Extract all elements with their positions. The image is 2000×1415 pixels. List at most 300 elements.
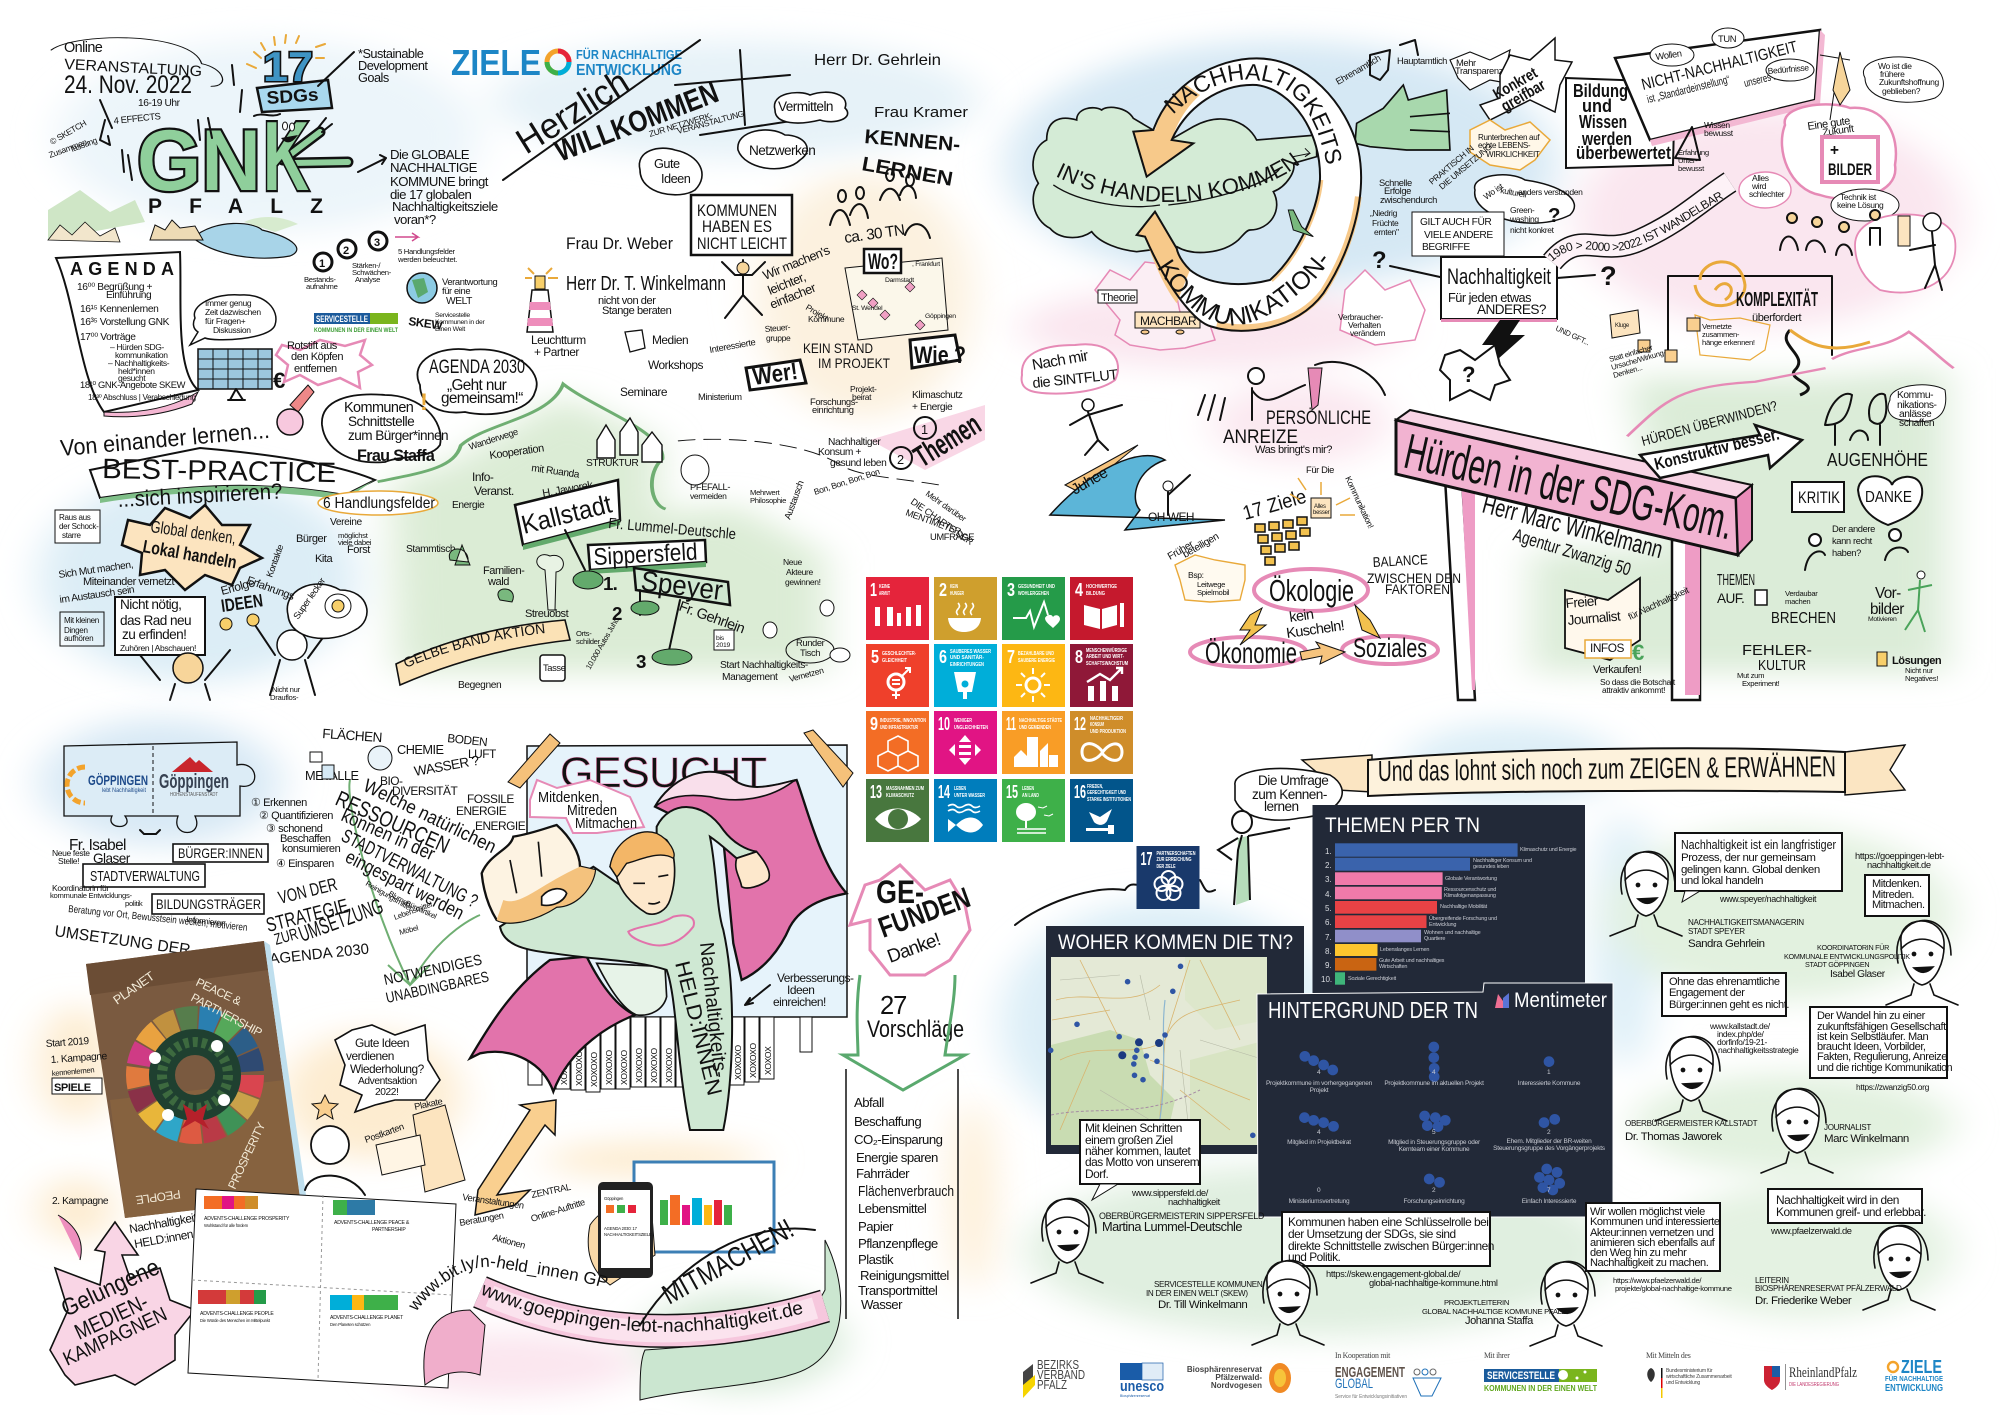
Augenhoehe: AUGENHÖHE (1827, 450, 1928, 470)
tile 2: HUNGER (950, 591, 964, 597)
hand-side bubbles: ? (1372, 247, 1386, 274)
ring lettering: KOMMUNIKATION- (1158, 256, 1326, 326)
Wer wie kein Stand (698, 302, 966, 415)
bar chart: Wirtschaften (1379, 964, 1407, 970)
tile 7: 7 (1007, 647, 1015, 667)
quote Staffa: Johanna Staffa (1465, 1315, 1534, 1327)
quote Lummel (1031, 1120, 1265, 1283)
campaign notes: 1. Kampagne (50, 1051, 108, 1066)
resource words: FOSSILE (467, 792, 514, 806)
Hintergrund panel: Projekt (1310, 1087, 1329, 1094)
Hintergrund panel: 4 (1432, 1069, 1436, 1076)
tile 12: NACHHALTIGE/R (1090, 716, 1123, 722)
SKEW logos: Kommunen in der (435, 319, 485, 326)
Gesucht poster (508, 730, 853, 1092)
journalist book (1565, 578, 1691, 695)
quote Till Winkelmann: Kommunen haben eine Schlüsselrolle bei (1288, 1215, 1488, 1229)
tile 15: LEBEN (1022, 786, 1034, 792)
Themen brechen etc: BRECHEN (1771, 610, 1836, 627)
hero text: Mitmachen (575, 815, 637, 832)
Themen brechen etc: THEMEN (1717, 572, 1755, 589)
tile 12: UND PRODUKTION (1090, 729, 1126, 735)
BMZ: Mit Mitteln des (1646, 1351, 1691, 1360)
quote Glaser: Mitdenken. (1872, 878, 1922, 890)
GNK explanation: NACHHALTIGE (390, 160, 478, 175)
Komplexitaet: KOMPLEXITÄT (1736, 288, 1818, 311)
bar chart: Gute Arbeit und nachhaltiges (1379, 958, 1445, 964)
quote Jaworek: Dr. Thomas Jaworek (1625, 1131, 1722, 1143)
Themen arrow and chart note: Mehr darüber (924, 488, 968, 524)
bar chart: 2. (1325, 861, 1332, 870)
tile 10: WENIGER (954, 718, 972, 724)
advent challenge cards: Die Würde des Menschen im Mittelpunkt (200, 1318, 271, 1323)
Hintergrund panel: Ehem. Mitglieder der BR-weiten (1507, 1138, 1592, 1145)
town signs: Fr. Gehrlein (677, 599, 747, 637)
Themen arrow and chart note: 2 (897, 452, 904, 467)
yellow band ribbon: GELBE BAND AKTION (404, 624, 544, 666)
hero text: Nachhaltigkeits- (695, 941, 731, 1079)
17 SDGs sign (247, 35, 428, 112)
Themen arrow and chart note: gesund leben (830, 458, 887, 469)
stakeholder boxes: UMSETZUNG DER... (53, 923, 204, 961)
tile 11: NACHHALTIGE STÄDTE (1019, 717, 1062, 724)
campaign notes: kennenlernen (51, 1065, 95, 1078)
agenda scroll: kommunikation (115, 350, 168, 360)
tile 8: 8 (1075, 647, 1083, 667)
Wer wie kein Stand: Steuer- (764, 322, 791, 334)
hand-side bubbles: Transparenz (1455, 66, 1504, 76)
stakeholder boxes: Informieren (186, 914, 226, 928)
yellow band ribbon (395, 616, 621, 691)
17 Ziele and balance: Früher (1166, 539, 1196, 563)
puzzle logos: GÖPPINGEN (88, 772, 148, 788)
welcome title: Herzlich (509, 61, 636, 162)
agenda scroll: 18³⁰ Abschluss | Verabschiedung (88, 393, 196, 402)
journalist book: attraktiv ankommt! (1602, 685, 1665, 695)
tile 14: UNTER WASSER (954, 793, 985, 799)
Persoenliche Anreize: PERSÖNLICHE (1266, 408, 1371, 429)
Agenda 2030 cloud: gemeinsam!“ (441, 390, 523, 407)
quote Staffa: Kommunen und interessierte (1590, 1216, 1720, 1228)
journalist book: Freier (1565, 593, 1599, 611)
resource words: DIVERSITÄT (392, 784, 457, 798)
quote Lummel: Mit kleinen Schritten (1085, 1121, 1182, 1135)
left notes: Raus aus (59, 513, 91, 522)
Themen arrow and chart note: Konsum + (818, 447, 861, 458)
Best practice arrow (59, 417, 375, 512)
Rotstift bubble (273, 340, 372, 435)
Bildung und Wissen: und (1582, 96, 1612, 116)
Rad bubble: Nicht nur (272, 685, 301, 694)
Agenda 2030 cloud: Frau Staffa (357, 447, 436, 465)
quote Winkelmann: https://zwanzig50.org (1856, 1082, 1930, 1092)
Wer wie kein Stand: Projekt- (804, 302, 832, 324)
Agenda 2030 cloud: Kommunen (344, 400, 414, 416)
SKEW logos: KOMMUNEN IN DER EINEN WELT (314, 328, 398, 334)
Gute Ideen bubble: verdienen (346, 1049, 394, 1063)
media items: Medien (652, 333, 688, 347)
Wer wie kein Stand: gruppe (766, 333, 791, 343)
tile 3: GESUNDHEIT UND (1018, 584, 1055, 590)
website and phone: AGENDA 2030: 17 (604, 1226, 638, 1231)
Wer wie kein Stand: KEIN STAND (803, 340, 873, 356)
Rad bubble: Erfahrungs (245, 575, 297, 603)
quote Till Winkelmann: der Umsetzung der SDGs, sie sind (1288, 1227, 1456, 1241)
tile 16: STARKE INSTITUTIONEN (1087, 797, 1131, 803)
Zukunft frame: schlechter (1749, 189, 1785, 199)
Komplexitaet: Denken... (1612, 363, 1644, 380)
stakeholder boxes: kommunale Entwicklungs- (50, 891, 132, 900)
tile 17: PARTNERSCHAFTEN (1156, 851, 1196, 857)
right side small: Mehrwert (750, 488, 781, 497)
Hintergrund panel: 5 (1432, 1129, 1436, 1136)
town signs: bis (716, 635, 725, 642)
hand-side bubbles: zwischendurch (1380, 195, 1437, 205)
town signs: Speyer (639, 565, 724, 606)
proposals list: Wasser (861, 1297, 903, 1312)
welcome title: WILLKOMMEN (551, 76, 723, 169)
watercolour washes (38, 719, 992, 1396)
bubble and video grid: Zeit dazwischen (205, 307, 261, 317)
left notes: Sich Mut machen, (58, 560, 134, 581)
quote Gehrlein: und lokal handeln (1681, 875, 1763, 887)
hand-side bubbles: Früchte (1372, 218, 1399, 228)
Gute Ideen bubble: Postkarten (363, 1121, 405, 1145)
Ziele logo small: FÜR NACHHALTIGE (1885, 1374, 1943, 1383)
agenda scroll: AGENDA (70, 259, 174, 279)
Themen brechen etc (1717, 571, 1942, 688)
Hintergrund panel: Mitglied in Steuerungsgruppe oder (1388, 1139, 1481, 1146)
Themen brechen etc: AUF. (1717, 591, 1744, 606)
Rheinland-Pfalz: DIE LANDESREGIERUNG (1789, 1382, 1839, 1388)
Handlungsfelder: wald (487, 576, 509, 588)
Kennenlernen and people: KENNEN- (864, 126, 961, 156)
journalist book: Journalist (1567, 608, 1621, 628)
tile 14 (934, 779, 997, 842)
bar chart: Nachhaltiger Konsum und (1473, 858, 1532, 864)
journalist book: für Nachhaltigkeit (1627, 585, 1691, 622)
Bildung und Wissen: Wissen (1704, 120, 1730, 130)
event info: © SKETCH (48, 118, 88, 147)
tile 17 (1136, 846, 1200, 909)
tile 4: HOCHWERTIGE (1086, 584, 1117, 590)
agenda scroll: 16³⁵ Vorstellung GNK (80, 317, 170, 328)
Hintergrund panel: Interessierte Kommune (1518, 1080, 1581, 1087)
quote Glaser: KOMMUNALE ENTWICKLUNGSPOLITIK (1784, 952, 1910, 961)
analysis steps: werden beleuchtet. (397, 255, 457, 264)
bubble and video grid: für Fragen+ (205, 316, 246, 326)
hand-side bubbles: echte LEBENS- (1478, 141, 1531, 150)
advent challenge cards (188, 1189, 456, 1388)
Persoenliche Anreize: Was bringt's mir? (1255, 444, 1332, 456)
yellow band ribbon: Tasse (543, 663, 566, 673)
clouds and box: Kommunen: Vermitteln (778, 99, 833, 114)
Theorie Machbar (1095, 262, 1215, 350)
Nachhaltigkeit box: verändern (1350, 328, 1386, 338)
hand-side bubbles: nicht konkret (1510, 225, 1555, 235)
analysis steps: aufnahme (306, 282, 338, 291)
Rad bubble: Zuhören | Abschauen! (120, 643, 196, 653)
Nachhaltigkeit box: ? (1462, 362, 1475, 387)
Gesucht poster: XOXOXO (619, 1050, 629, 1085)
Augenhoehe (1825, 385, 1946, 470)
puzzle logos: lebt Nachhaltigkeit (102, 788, 146, 794)
Ziele logo small: ZIELE (1901, 1357, 1942, 1377)
quote Jaworek (1625, 973, 1799, 1143)
journalist book: INFOS (1590, 641, 1624, 655)
Nachhaltigkeit box: ANDERES? (1477, 302, 1547, 317)
quote Lummel: näher kommen, lautet (1085, 1144, 1192, 1158)
event info: Zusammen- (47, 136, 91, 160)
tile 11 (1002, 711, 1065, 774)
Handlungsfelder: Stammtisch (406, 544, 456, 555)
town signs: 3 (636, 651, 646, 672)
hand-side bubbles: Wo ist (1481, 181, 1505, 202)
bar chart: 9. (1325, 961, 1332, 970)
Handlungsfelder: Energie (452, 500, 485, 511)
GNK explanation: Nachhaltigkeitsziele (392, 199, 498, 214)
Bildung und Wissen: Bildung (1573, 81, 1628, 101)
tile 5: GLEICHHEIT (882, 658, 907, 664)
website and phone (459, 1162, 774, 1285)
advent challenge cards: Den Planeten schützen (330, 1322, 371, 1327)
website and phone: Online-Auftritte (530, 1197, 586, 1224)
Themen brechen etc: Lösungen (1892, 655, 1942, 667)
17 SDGs sign: Development (358, 58, 428, 73)
Komplexitaet (1608, 262, 1870, 395)
tile 4: 4 (1075, 580, 1083, 600)
17 Ziele and balance: Für Die (1306, 465, 1334, 475)
Theorie Machbar: Theorie (1101, 292, 1136, 304)
strategy: UMSETZUNG (295, 893, 386, 947)
bar chart: 10. (1321, 975, 1332, 984)
Handlungsfelder: Streuobst (525, 608, 569, 620)
URL ribbon and mitmachen: MITMACHEN! (657, 1213, 799, 1310)
bar chart: Übergreifende Forschung und (1429, 915, 1497, 922)
Wer wie kein Stand: Ministerium (698, 392, 742, 402)
bar chart: 6. (1325, 918, 1332, 927)
Bildung und Wissen: Wissen (1579, 112, 1627, 132)
Huerden sign (1396, 410, 1752, 700)
tile 2: 2 (939, 580, 947, 600)
Themen panel with bar chart: THEMEN PER TN (1325, 814, 1480, 837)
resource words (251, 726, 526, 985)
17 SDGs sign: 17 (263, 43, 313, 90)
quote Weber: www.pfaelzerwald.de (1770, 1226, 1852, 1236)
Themen brechen etc: FEHLER- (1742, 642, 1812, 659)
quote Staffa: animieren sich ebenfalls auf (1590, 1237, 1716, 1249)
Wer wie kein Stand: IM PROJEKT (818, 355, 890, 371)
Handlungsfelder: Vereine (330, 517, 362, 528)
Nachhaltigkeit box: Nachhaltigkeit (1447, 264, 1551, 289)
analysis steps: 3 (374, 237, 380, 249)
Sintflut: die SINTFLUT (1032, 367, 1119, 392)
SKEW logos (314, 273, 498, 334)
Themen arrow and chart note: Nachhaltiger (828, 437, 881, 448)
town signs: Fr. Lummel-Deutschle (608, 515, 737, 543)
quote Till Winkelmann: SERVICESTELLE KOMMUNEN (1154, 1280, 1263, 1289)
tile 1 (866, 577, 929, 640)
Hintergrund panel: 2 (1432, 1187, 1436, 1194)
hand-side bubbles: kulturell (1500, 185, 1528, 200)
intro figure: lernen (1264, 799, 1298, 814)
Kennenlernen and people (830, 126, 961, 340)
BMZ: und Entwicklung (1666, 1380, 1700, 1386)
quote Till Winkelmann: direkte Schnittstelle zwischen Bürger:innen (1288, 1239, 1494, 1253)
Handlungsfelder: Wanderwege (468, 427, 519, 452)
Huerden sign: Herr Marc Winkelmann (1479, 491, 1666, 564)
advent poster: PEACE & (194, 975, 244, 1008)
bubble and video grid: Immer genug (205, 298, 252, 308)
Best practice arrow: BEST-PRACTICE (102, 453, 336, 488)
Agenda 2030 cloud: zum Bürger*innen (348, 428, 448, 443)
Themen panel with bar chart (1312, 805, 1585, 995)
ZIELE logo (451, 42, 682, 83)
SDG ring (116, 996, 274, 1154)
campaign notes: Start 2019 (45, 1036, 90, 1050)
Wer wie kein Stand: Kommune (808, 314, 845, 324)
analysis steps: 2 (343, 245, 349, 257)
website and phone: ZENTRAL (530, 1182, 572, 1200)
hand-side bubbles: ernten" (1374, 227, 1399, 237)
hero text: Mitreden (567, 802, 617, 819)
left notes: Dingen (64, 626, 88, 635)
Kennenlernen and people: ca. 30 TN (843, 222, 905, 247)
right side small: Akteure (786, 567, 813, 577)
Augenhoehe: anlässe (1899, 409, 1932, 420)
Themen arrow and chart note: 1 (921, 422, 928, 437)
quote Winkelmann: Fakten, Regulierung, Anreize (1817, 1051, 1947, 1063)
Komplexitaet: zusammen- (1702, 330, 1740, 339)
right side small: Austausch (782, 479, 806, 521)
Bezirksverband Pfalz: VERBAND (1037, 1367, 1085, 1382)
question text: eingespart werden (342, 847, 467, 924)
bar chart (1321, 843, 1577, 985)
quote Staffa (1422, 1203, 1732, 1346)
Bildung und Wissen: unseres Lebens (1743, 65, 1799, 90)
campaign notes: 2. Kampagne (52, 1196, 109, 1207)
quote Winkelmann: JOURNALIST (1824, 1123, 1871, 1132)
Augenhoehe: schaffen (1899, 418, 1935, 429)
Gesucht poster: GESUCHT (560, 749, 767, 797)
Bezirksverband Pfalz (1023, 1357, 1085, 1398)
hand-side bubbles: „Niedrig (1370, 208, 1398, 218)
quote Till Winkelmann: und Politik. (1288, 1250, 1341, 1264)
Zukunft frame: keine Lösung (1837, 200, 1884, 210)
Handlungsfelder (296, 418, 662, 620)
Gute Ideen bubble: Adventsaktion (358, 1076, 417, 1087)
Themen brechen etc: Negatives! (1905, 674, 1938, 683)
hand-side bubbles: greifbar (1498, 77, 1549, 115)
quote Gehrlein: Prozess, der nur gemeinsam (1681, 852, 1816, 864)
tile 13 (866, 779, 929, 842)
quote Winkelmann: braucht Ideen, Vorbilder, (1817, 1041, 1926, 1053)
campaign notes (45, 1036, 109, 1207)
Themen brechen etc: bilder (1870, 601, 1904, 618)
resource words: BODEN (447, 731, 488, 749)
strategy (264, 874, 386, 968)
Engagement Global: GLOBAL (1335, 1375, 1373, 1391)
Agenda 2030 cloud (322, 349, 537, 465)
media items: Workshops (648, 358, 703, 372)
drawing lines (51, 38, 223, 86)
resource words: ③ schonend (266, 823, 323, 835)
quote Till Winkelmann: IN DER EINEN WELT (SKEW) (1146, 1289, 1248, 1298)
17 Ziele and balance: besser (1313, 510, 1330, 516)
Rad bubble: Erfolge (219, 575, 257, 598)
proposals list: Lebensmittel (858, 1201, 927, 1216)
quote Glaser: Isabel Glaser (1830, 969, 1886, 980)
Sintflut: Juhee (1068, 464, 1111, 498)
Gesucht poster: XOXOXO (559, 1050, 569, 1085)
sponsor logos (1023, 1351, 1943, 1400)
SKEW logos: SKEW (408, 314, 444, 333)
tile 2: KEIN (950, 584, 958, 590)
tile 17: 17 (1140, 849, 1152, 869)
analysis steps: Schwächen- (352, 268, 392, 277)
Hintergrund panel: 4 (1317, 1069, 1321, 1076)
bar chart: Nachhaltige Mobilität (1440, 904, 1488, 910)
Augenhoehe: nikations- (1897, 400, 1937, 411)
website and phone: Beratungen (459, 1210, 504, 1228)
proposals list: CO₂-Einsparung (854, 1132, 943, 1147)
Wer wie kein Stand: Wie ? (914, 342, 966, 369)
proposals list: Beschaffung (854, 1114, 921, 1129)
town signs: 2019 (716, 642, 731, 649)
Wer wie kein Stand: Interessierte (709, 337, 756, 355)
proposals list: Plastik (858, 1252, 894, 1267)
clouds and box: Kommunen: einfacher (768, 279, 819, 312)
Bildung und Wissen: Wollen (1655, 48, 1682, 62)
Konstruktiv arrow (1639, 396, 1802, 478)
17 Ziele and balance: Soziales (1353, 633, 1427, 663)
Bezirksverband Pfalz: BEZIRKS (1037, 1357, 1079, 1372)
proposals list: Flächenverbrauch (858, 1183, 954, 1200)
clouds and box: Kommunen: Netzwerken (749, 143, 815, 158)
Themen arrow and chart note: Themen (908, 408, 987, 474)
stakeholder boxes: Glaser (93, 851, 131, 866)
yellow band ribbon: schilder (576, 637, 601, 646)
Konstruktiv arrow: Konstruktiv besser. (1652, 424, 1781, 474)
tile 9: INDUSTRIE, INNOVATION (880, 718, 926, 724)
strategy: VON DER (276, 874, 339, 908)
right side small: Tisch (800, 648, 820, 658)
Mentimeter logo: Mentimeter (1514, 989, 1607, 1012)
advent poster: PEOPLE (135, 1187, 182, 1207)
question text: UNABDINGBARES (384, 968, 491, 1007)
Agenda 2030 cloud: ! (420, 389, 427, 416)
Hintergrund panel: Mitglied im Projektbeirat (1287, 1139, 1351, 1146)
hero text: HELD:INNEN (670, 959, 726, 1098)
Ziele logo small: ENTWICKLUNG (1885, 1382, 1943, 1394)
tile 6: EINRICHTUNGEN (950, 662, 984, 668)
Hintergrund panel: 4 (1317, 1129, 1321, 1136)
resource words: WASSER ? (413, 753, 481, 779)
Zukunft frame (1739, 52, 1955, 293)
tile 7: SAUBERE ENERGIE (1018, 658, 1055, 664)
clouds and box: Kommunen: Ideen (661, 171, 691, 186)
question text: NOTWENDIGES (382, 951, 484, 989)
quote Staffa: projekte/global-nachhaltige-kommune (1615, 1284, 1732, 1293)
hand-side bubbles: Green- (1510, 205, 1535, 215)
question text: RESSOURCEN (332, 786, 454, 858)
quote Jaworek: Ohne das ehrenamtliche (1669, 976, 1780, 988)
resource words: Beschaffen (280, 833, 331, 845)
Wer wie kein Stand: beirat (852, 392, 872, 402)
Biosphaere: Nordvogesen (1211, 1381, 1262, 1390)
analysis steps: 5 Handlungsfelder (398, 247, 456, 256)
Bildung und Wissen: bewusst (1704, 128, 1734, 138)
